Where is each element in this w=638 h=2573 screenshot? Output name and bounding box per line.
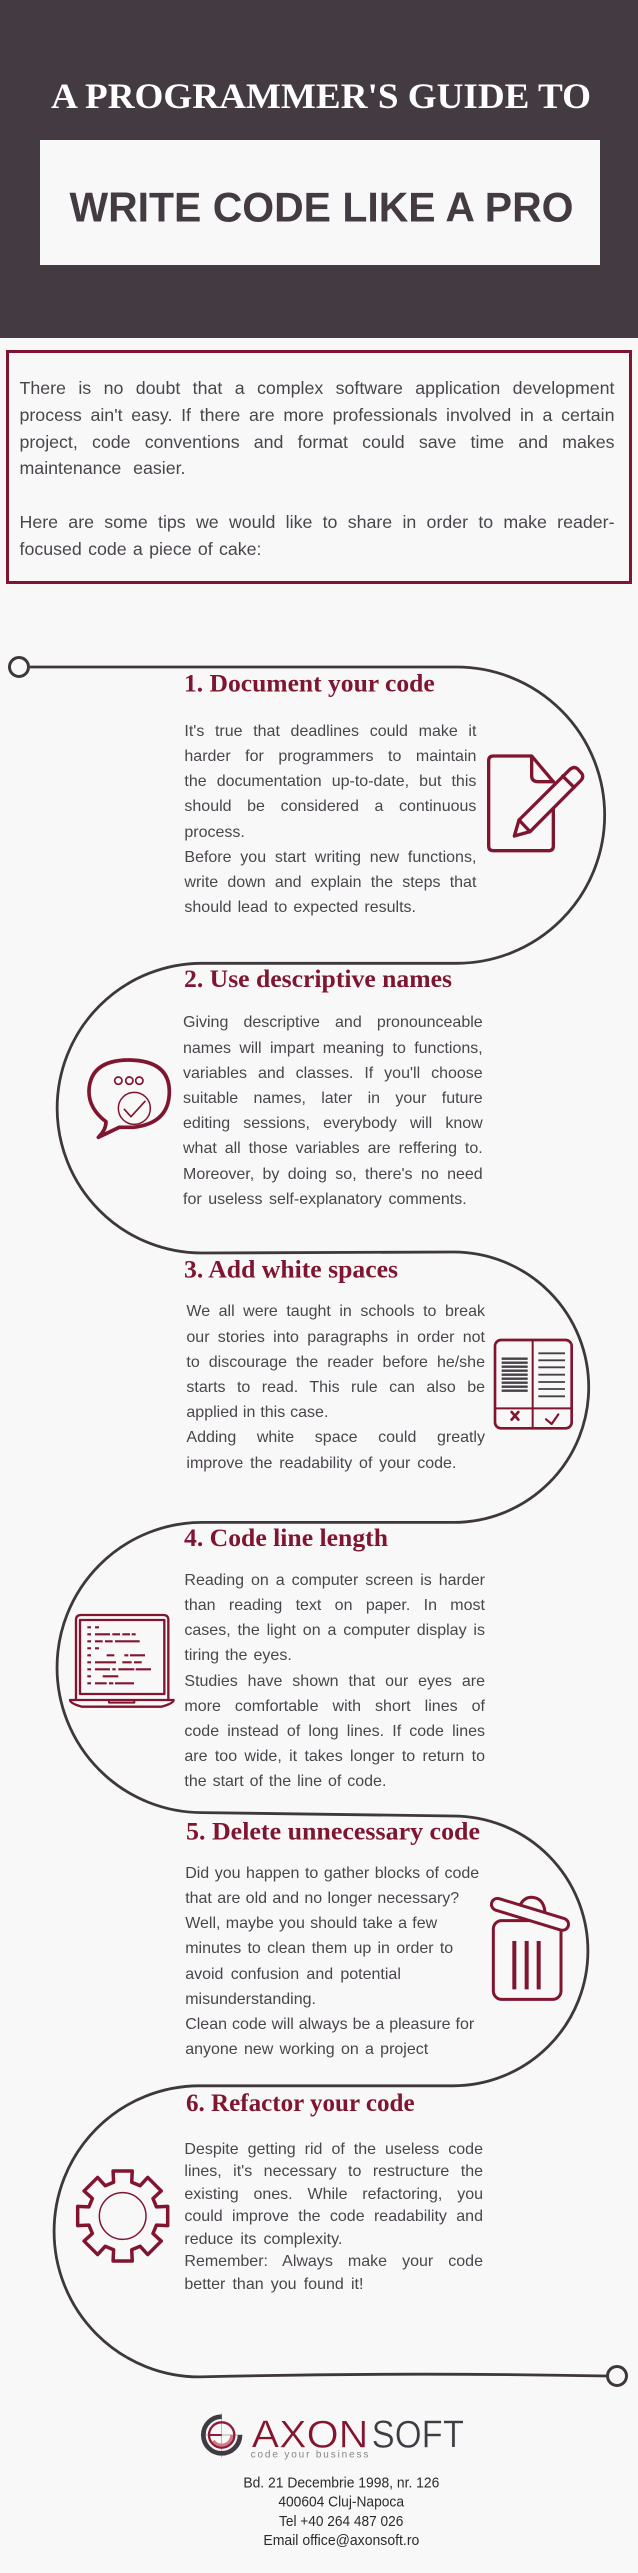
heading 3: 3. Add white spaces xyxy=(184,1256,398,1284)
text block 3 xyxy=(186,1303,485,1472)
text block 4: code instead of long lines. If code lines xyxy=(184,1723,485,1740)
icon: speech bubble with check xyxy=(87,1058,172,1140)
icon: document and pencil xyxy=(487,754,584,852)
header band xyxy=(0,0,638,338)
text block 4 xyxy=(184,1572,485,1790)
text block 6: lines, it's necessary to restructure the xyxy=(184,2163,483,2180)
text block 3: applied in this case. xyxy=(186,1404,328,1421)
text block 2: suitable names, later in your future xyxy=(183,1090,483,1107)
text block 4: tiring the eyes. xyxy=(184,1647,292,1664)
text block 3: to discourage the reader before he/she xyxy=(186,1354,485,1371)
contact details: Tel +40 264 487 026 xyxy=(279,2513,403,2530)
text block 2: for useless self-explanatory comments. xyxy=(183,1191,467,1208)
text block 2: names will impart meaning to functions, xyxy=(183,1040,483,1057)
text block 5: misunderstanding. xyxy=(185,1991,316,2008)
text block 2: editing sessions, everybody will know xyxy=(183,1115,483,1132)
text block 3: our stories into paragraphs in order not xyxy=(186,1329,485,1346)
panel: step 4 code line length xyxy=(68,1525,485,1790)
text block 4: Reading on a computer screen is harder xyxy=(184,1572,485,1589)
text block 5: that are old and no longer necessary? xyxy=(185,1890,459,1907)
text block 1: It's true that deadlines could make it xyxy=(184,723,476,740)
text block 6: existing ones. While refactoring, you xyxy=(184,2186,483,2203)
contact details: 400604 Cluj-Napoca xyxy=(278,2494,405,2511)
text block 6: reduce its complexity. xyxy=(184,2231,342,2248)
logo: axonsoft: code your business xyxy=(251,2449,368,2460)
text block 1: Before you start writing new functions, xyxy=(184,849,476,866)
text block 6: could improve the code readability and xyxy=(184,2208,483,2225)
text block 4: are too wide, it takes longer to return to xyxy=(184,1748,485,1765)
panel: step 3 add white spaces xyxy=(184,1256,573,1472)
heading 4: 4. Code line length xyxy=(184,1525,388,1552)
text block 6: better than you found it! xyxy=(184,2276,363,2293)
text block 4: cases, the light on a computer display is xyxy=(184,1622,485,1639)
heading 2: 2. Use descriptive names xyxy=(184,966,452,993)
logo: axonsoft: SOFT xyxy=(372,2412,464,2456)
text block 2: variables and classes. If you'll choose xyxy=(183,1065,483,1082)
panel: step 6 refactor your code xyxy=(76,2090,483,2293)
intro text: process ain't easy. If there are more professionals involved in a certain xyxy=(20,405,614,425)
text block 2: what all those variables are reffering to. xyxy=(183,1140,483,1157)
text block 5: anyone new working on a project xyxy=(185,2041,428,2058)
intro text xyxy=(20,378,614,559)
contact details: Email office@axonsoft.ro xyxy=(263,2532,419,2549)
text block 3: Adding white space could greatly xyxy=(186,1429,485,1446)
logo: axonsoft xyxy=(201,2412,464,2460)
panel: step 5 delete unnecessary code xyxy=(185,1819,570,2058)
text block 5: avoid confusion and potential xyxy=(185,1966,401,1983)
title: a programmer's guide to: A PROGRAMMER'S GUIDE TO xyxy=(51,76,591,116)
text block 5: minutes to clean them up in order to xyxy=(185,1940,453,1957)
panel: introduction xyxy=(6,350,632,584)
text block 2 xyxy=(183,1014,483,1208)
intro text: Here are some tips we would like to share in order to make reader- xyxy=(20,512,614,532)
heading 1: 1. Document your code xyxy=(184,670,435,697)
icon: gear xyxy=(76,2169,170,2263)
icon: dense versus spaced text columns xyxy=(494,1338,573,1430)
intro text: maintenance easier. xyxy=(20,458,186,478)
text block 4: Studies have shown that our eyes are xyxy=(184,1673,485,1690)
text block 1: process. xyxy=(184,824,245,841)
text block 2: Giving descriptive and pronounceable xyxy=(183,1014,483,1031)
icon: laptop with code xyxy=(68,1614,175,1708)
text block 6: Despite getting rid of the useless code xyxy=(184,2141,483,2158)
main heading: WRITE CODE LIKE A PRO xyxy=(69,183,573,230)
text block 3: improve the readability of your code. xyxy=(186,1455,456,1472)
intro text: focused code a piece of cake: xyxy=(20,539,262,559)
text block 5: Well, maybe you should take a few xyxy=(185,1915,437,1932)
text block 1: should be considered a continuous xyxy=(184,798,476,815)
heading 6: 6. Refactor your code xyxy=(186,2090,415,2117)
text block 2: Moreover, by doing so, there's no need xyxy=(183,1166,483,1183)
logo: axonsoft: AXON xyxy=(252,2412,368,2456)
contact details xyxy=(243,2474,439,2549)
text block 1: harder for programmers to maintain xyxy=(184,748,476,765)
contact details: Bd. 21 Decembrie 1998, nr. 126 xyxy=(243,2474,439,2491)
title box: write code like a pro xyxy=(40,140,600,265)
panel: step 1 document your code xyxy=(184,670,584,916)
text block 5: Did you happen to gather blocks of code xyxy=(185,1865,479,1882)
text block 5: Clean code will always be a pleasure for xyxy=(185,2016,474,2033)
text block 3: We all were taught in schools to break xyxy=(186,1303,485,1320)
heading 5: 5. Delete unnecessary code xyxy=(186,1819,480,1846)
panel: step 2 use descriptive names xyxy=(87,966,483,1208)
text block 1: write down and explain the steps that xyxy=(184,874,476,891)
text block 1: the documentation up-to-date, but this xyxy=(184,773,476,790)
text block 4: more comfortable with short lines of xyxy=(184,1698,485,1715)
intro text: project, code conventions and format could save time and makes xyxy=(20,432,614,452)
text block 6 xyxy=(184,2141,483,2293)
intro text: There is no doubt that a complex software application development xyxy=(20,378,614,398)
text block 6: Remember: Always make your code xyxy=(184,2253,483,2270)
icon: trash can xyxy=(490,1896,570,2001)
text block 5 xyxy=(185,1865,479,2058)
footer: logo and contact xyxy=(200,2412,464,2549)
text block 1: should lead to expected results. xyxy=(184,899,416,916)
text block 1 xyxy=(184,723,476,916)
text block 4: the start of the line of code. xyxy=(184,1773,386,1790)
text block 4: than reading text on paper. In most xyxy=(184,1597,485,1614)
text block 3: starts to read. This rule can also be xyxy=(186,1379,485,1396)
